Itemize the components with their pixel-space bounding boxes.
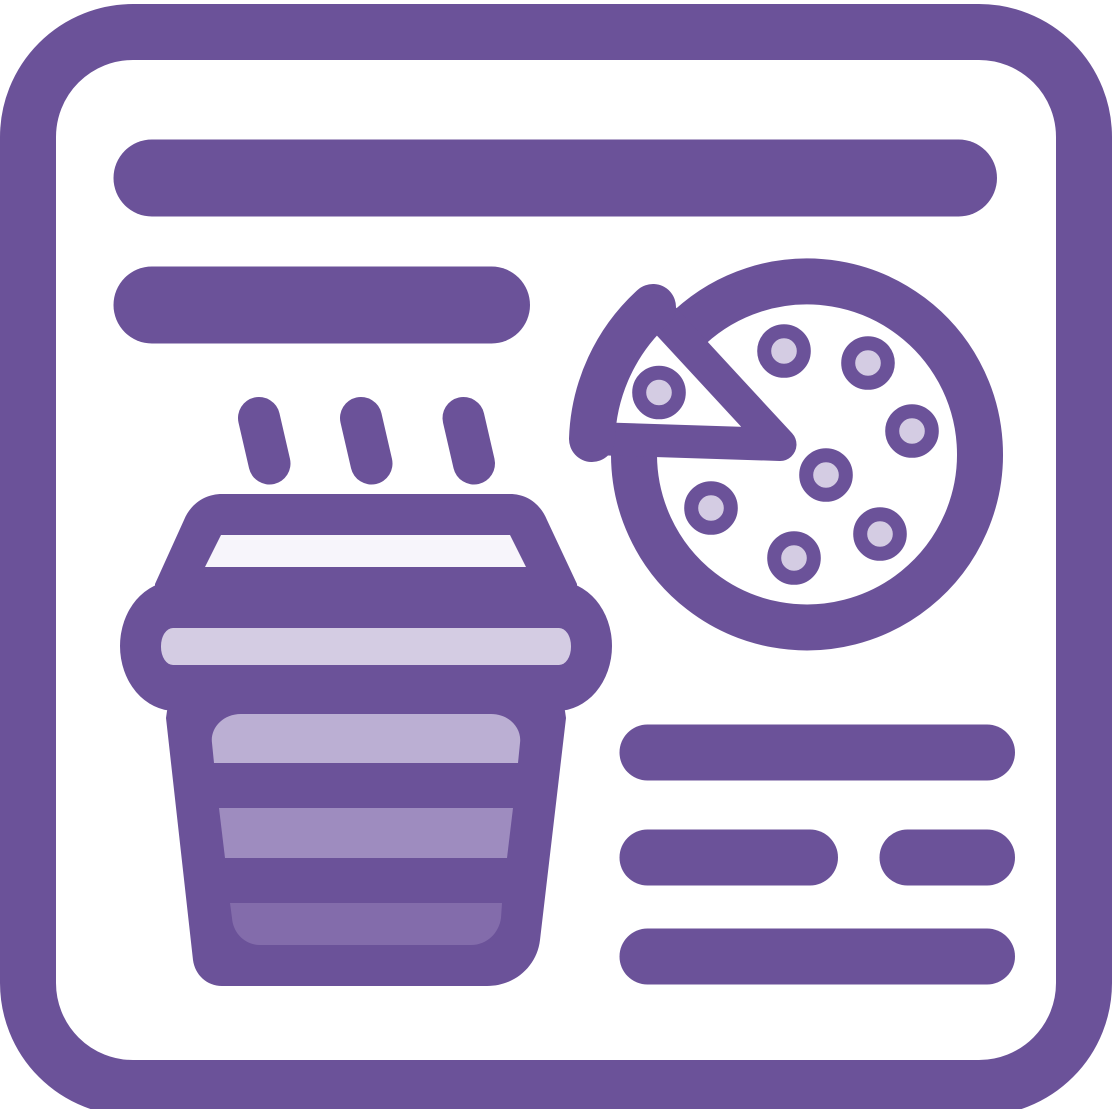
slice crust — [592, 307, 653, 439]
icon: steam lines — [259, 418, 474, 464]
pepperoni toppings — [639, 331, 932, 578]
pizza slice — [592, 307, 780, 444]
pizza body — [634, 281, 980, 627]
icon: pizza — [592, 281, 980, 627]
rim highlight — [161, 628, 571, 665]
cup band medium — [219, 808, 513, 858]
cup band dark — [230, 903, 502, 945]
icon: coffee cup — [120, 494, 612, 986]
lid top — [155, 494, 577, 610]
lid rim — [120, 581, 612, 711]
cup band light — [212, 714, 520, 763]
lid window — [205, 535, 526, 567]
cup body — [166, 700, 566, 986]
menu text bars — [114, 140, 1015, 984]
